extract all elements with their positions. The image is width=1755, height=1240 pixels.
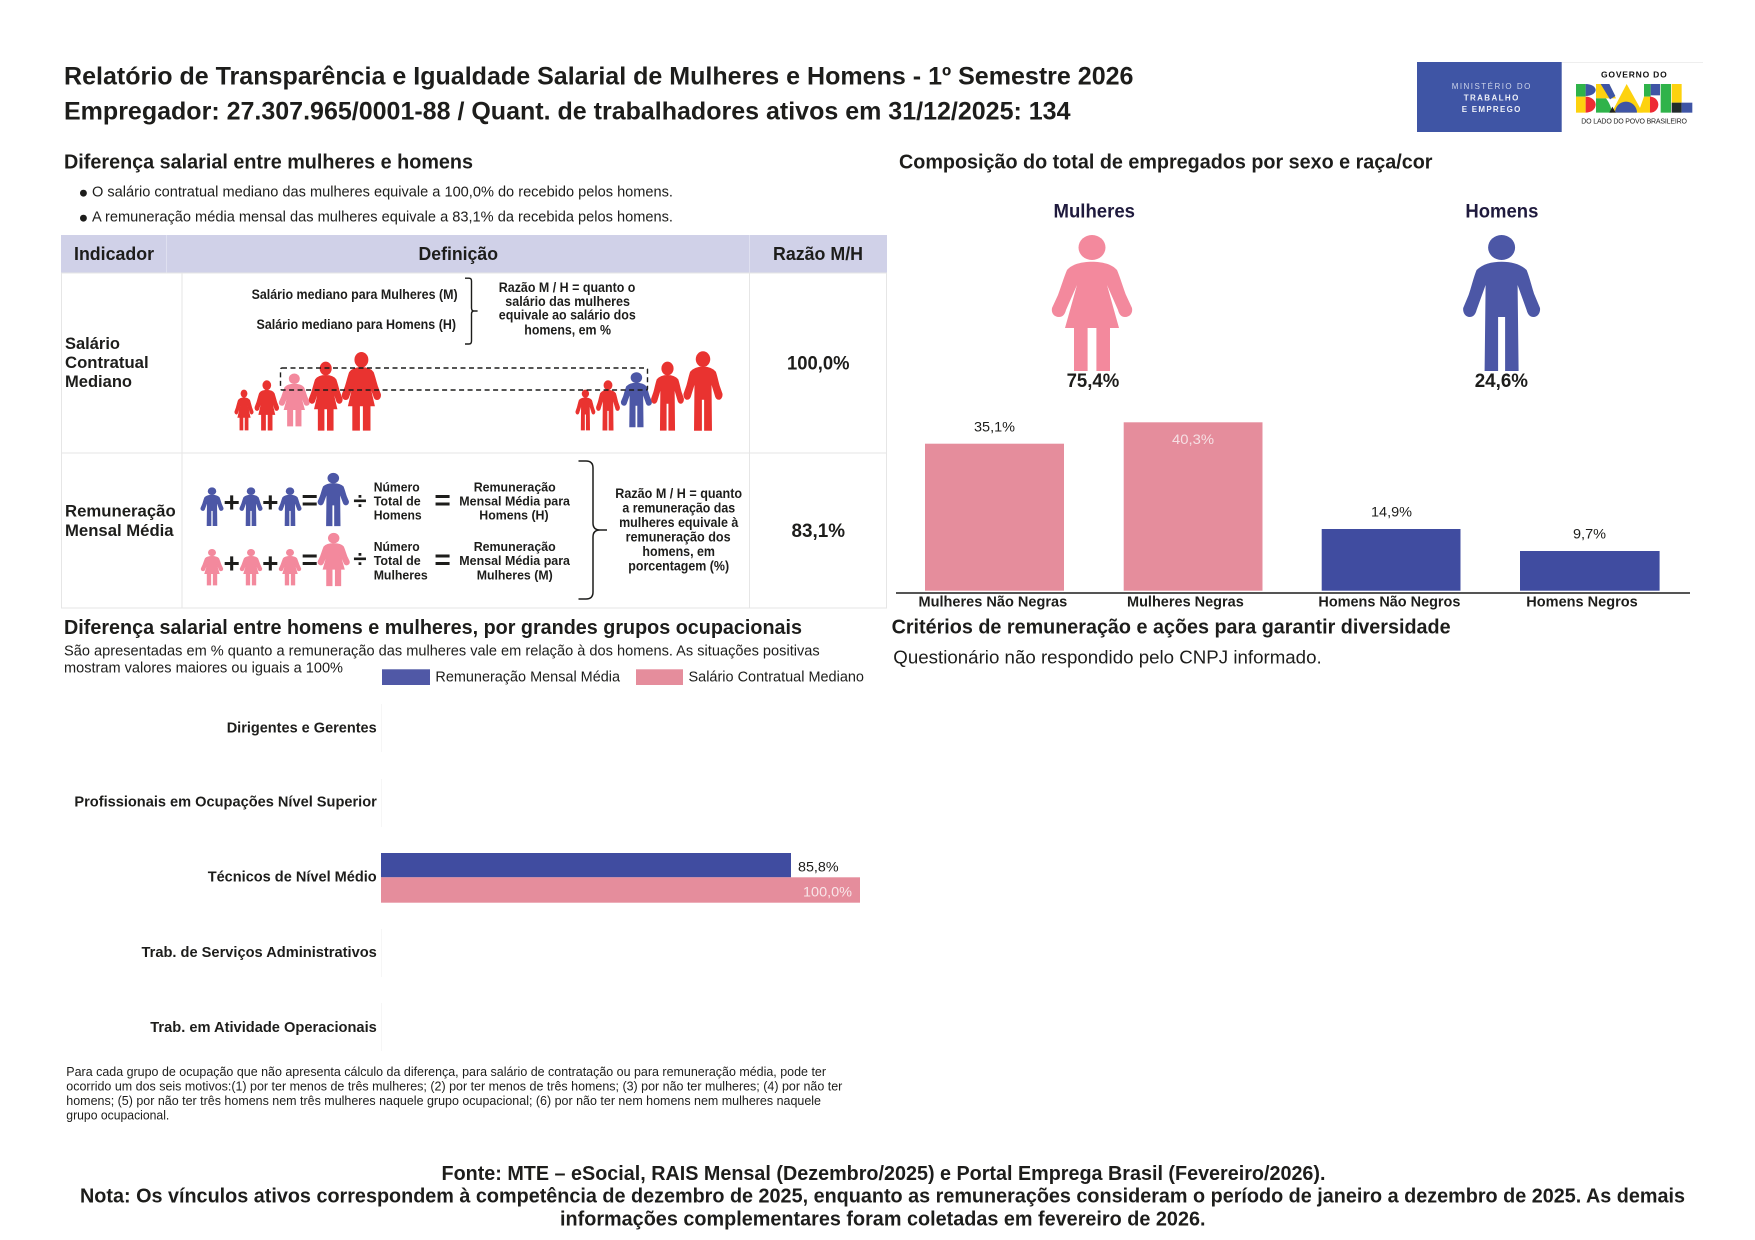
equation: mulheres: = (302, 544, 318, 575)
row label: salário contratual mediano: Salário (65, 334, 120, 353)
logo: Ministério do Trabalho e Emprego: MINISTÉRIO DO (1452, 82, 1530, 91)
definition: razão M/H salário (499, 280, 636, 338)
panel: composição por sexo e raça/cor (896, 152, 1690, 611)
brace: salário mediano (465, 278, 478, 344)
footer: fonte e nota: informações complementares foram coletadas em fevereiro de 2026. (560, 1209, 1206, 1231)
equation: mulheres: Total de (374, 553, 421, 568)
equation: homens: ÷ (353, 488, 367, 515)
definition labels: salário mediano (252, 286, 458, 332)
logo: Ministério do Trabalho e Emprego: TRABALHO (1464, 94, 1518, 103)
bar: homens negros: 9,7% (1573, 525, 1606, 541)
table header: Definição (418, 243, 498, 264)
footnote: Para cada grupo de ocupação que não apresenta cálculo da diferença, para salário de contratação ou para remuneração média, pode ter (66, 1064, 827, 1079)
row label: salário contratual mediano (65, 334, 149, 391)
equation: homens: Homens (H) (479, 507, 549, 522)
equation: mulheres: Remuneração (474, 539, 556, 554)
brace: remuneração média (578, 461, 607, 599)
bar chart: raça/cor (896, 419, 1690, 611)
title (64, 62, 1134, 126)
equation: homens: Homens (374, 507, 422, 522)
equation: homens: + (224, 486, 240, 518)
bullet text: remuneração média: ● (80, 214, 88, 224)
heading: grupos ocupacionais: Diferença salarial entre homens e mulheres, por grandes grupos ocupacionais (64, 617, 802, 639)
equation: homens: = (302, 484, 318, 516)
definition: razão M/H remuneração: remuneração dos (626, 530, 731, 545)
legend (382, 669, 864, 686)
icon group: homens em ordem de salário (576, 352, 722, 430)
equation: homens (201, 473, 571, 526)
description: mostram valores maiores ou iguais a 100% (64, 661, 343, 677)
axis labels (918, 594, 1638, 611)
footer: fonte e nota: Fonte: MTE – eSocial, RAIS Mensal (Dezembro/2025) e Portal Emprega Brasil (Fevereiro/2026). (442, 1163, 1326, 1185)
bar: mulheres negras (1124, 422, 1262, 591)
definition: razão M/H remuneração: porcentagem (%) (628, 559, 729, 574)
equation: mulheres: ÷ (353, 546, 367, 573)
row label: remuneração mensal média (65, 502, 176, 540)
bullet text: salário contratual: O salário contratual mediano das mulheres equivale a 100,0% do recebido pelos homens. (92, 184, 673, 201)
bar chart: grupos ocupacionais (74, 704, 860, 1051)
footer: fonte e nota: Nota: Os vínculos ativos correspondem à competência de dezembro de 2025, enquanto as remunerações consideram o período de janeiro a dezembro de 2025. As demais (80, 1186, 1685, 1208)
bullet text: remuneração média: A remuneração média mensal das mulheres equivale a 83,1% da recebida pelos homens. (92, 209, 673, 226)
equation: homens: + (262, 486, 278, 518)
table header: Razão M/H (773, 243, 863, 264)
bar: mulheres não negras (925, 419, 1064, 591)
equation: homens: = (434, 484, 451, 516)
value: percentual homens: 24,6% (1475, 370, 1528, 392)
bar: mulheres negras: 40,3% (1172, 431, 1214, 447)
category labels: Trab. em Atividade Operacionais (150, 1019, 377, 1036)
dashed box: comparação das medianas (280, 368, 648, 390)
category labels: Profissionais em Ocupações Nível Superior (74, 794, 377, 811)
axis labels: Homens Não Negros (1318, 594, 1460, 611)
footnote (66, 1064, 843, 1122)
panel: grupos ocupacionais (64, 617, 864, 1122)
bar: salário técnicos (381, 877, 860, 903)
table (61, 235, 887, 608)
axis labels: Mulheres Não Negras (918, 594, 1067, 611)
row label: salário contratual mediano: Contratual (65, 353, 149, 372)
equation: mulheres: + (224, 548, 240, 578)
equation: mulheres: Número (374, 539, 420, 554)
definition: razão M/H remuneração: mulheres equivale à (619, 515, 739, 530)
label: homens: Homens (1465, 200, 1539, 222)
icon: homem (1463, 235, 1540, 371)
icon group: mulheres em ordem de salário (235, 353, 380, 430)
footnote: ocorrido um dos seis motivos:(1) por ter menos de três mulheres; (2) por ter menos de três homens; (3) por não ter mulheres; (4) por não ter (66, 1079, 843, 1094)
bar: salário técnicos: 100,0% (803, 884, 852, 900)
definition: razão M/H remuneração (615, 486, 742, 574)
logo: Governo do Brasil (1562, 62, 1703, 126)
equation: homens: Total de (374, 494, 421, 509)
equation: mulheres: Mulheres (M) (477, 567, 553, 582)
legend: Salário Contratual Mediano (688, 669, 864, 686)
title: Relatório de Transparência e Igualdade Salarial de Mulheres e Homens - 1º Semestre 2026 (64, 62, 1134, 90)
category labels: Dirigentes e Gerentes (227, 720, 377, 737)
panel: diferença salarial (61, 152, 887, 608)
equation: mulheres: + (262, 548, 278, 578)
text: questionário: Questionário não respondido pelo CNPJ informado. (893, 647, 1322, 667)
definition: razão M/H salário: equivale ao salário dos (499, 308, 636, 323)
value: razão salário contratual: 100,0% (787, 352, 850, 374)
bar: remuneração técnicos: 85,8% (798, 859, 839, 875)
heading: composição: Composição do total de empregados por sexo e raça/cor (899, 152, 1433, 174)
footnote: grupo ocupacional. (66, 1107, 169, 1122)
definition: razão M/H salário: homens, em % (524, 323, 611, 338)
category labels: Trab. de Serviços Administrativos (142, 944, 377, 961)
description: São apresentadas em % quanto a remuneração das mulheres vale em relação à dos homens. As situações positivas (64, 644, 820, 660)
heading: critérios: Critérios de remuneração e ações para garantir diversidade (892, 616, 1451, 638)
equation: homens: Número (374, 480, 420, 495)
axis labels: Mulheres Negras (1127, 594, 1244, 611)
heading: diferença salarial: Diferença salarial entre mulheres e homens (64, 152, 473, 174)
axis labels: Homens Negros (1526, 594, 1638, 611)
bar: mulheres não negras: 35,1% (974, 419, 1015, 435)
definition: razão M/H salário: Razão M / H = quanto o (499, 280, 635, 295)
definition: razão M/H salário: salário das mulheres (505, 294, 630, 309)
label: mulheres: Mulheres (1054, 200, 1135, 222)
equation: mulheres: Mensal Média para (459, 553, 571, 568)
footer: fonte e nota (80, 1163, 1685, 1231)
logo: Ministério do Trabalho e Emprego: E EMPREGO (1462, 105, 1520, 114)
equation: homens: Remuneração (474, 480, 556, 495)
title: Empregador: 27.307.965/0001-88 / Quant. de trabalhadores ativos em 31/12/2025: 134 (64, 98, 1071, 126)
row label: remuneração mensal média: Remuneração (65, 502, 176, 521)
icon: mulher (1052, 235, 1132, 371)
description (64, 644, 820, 677)
definition: razão M/H remuneração: a remuneração das (622, 501, 735, 516)
equation: mulheres (201, 533, 571, 586)
definition: razão M/H remuneração: homens, em (642, 544, 715, 559)
footnote: homens; (5) por não ter três homens nem três mulheres naquele grupo ocupacional; (6) por não ter nem homens nem mulheres naquele (66, 1093, 821, 1108)
row label: salário contratual mediano: Mediano (65, 372, 132, 391)
legend: Remuneração Mensal Média (435, 669, 621, 686)
bar: remuneração técnicos (381, 853, 839, 877)
logo: Ministério do Trabalho e Emprego (1417, 62, 1562, 132)
bar: homens não negros (1322, 504, 1460, 591)
definition labels: salário mediano: Salário mediano para Homens (H) (256, 316, 456, 332)
row label: remuneração mensal média: Mensal Média (65, 521, 174, 540)
value: razão remuneração: 83,1% (792, 520, 845, 542)
definition: razão M/H remuneração: Razão M / H = quanto (615, 486, 742, 501)
table header (61, 235, 887, 273)
equation: homens: Mensal Média para (459, 494, 571, 509)
table header: Indicador (74, 243, 154, 264)
bar: homens negros (1520, 525, 1660, 591)
equation: mulheres: = (434, 544, 451, 575)
bullet text: salário contratual: ● (80, 188, 88, 198)
bar: homens não negros: 14,9% (1371, 504, 1412, 520)
category labels (74, 720, 377, 1036)
value: percentual mulheres: 75,4% (1067, 370, 1119, 392)
equation: mulheres: Mulheres (374, 567, 428, 582)
panel: critérios de remuneração (892, 616, 1451, 667)
logo: Governo do Brasil: GOVERNO DO (1601, 69, 1667, 79)
category labels: Técnicos de Nível Médio (208, 869, 377, 886)
definition labels: salário mediano: Salário mediano para Mulheres (M) (252, 286, 458, 302)
logo: Governo do Brasil: DO LADO DO POVO BRASILEIRO (1581, 119, 1688, 126)
